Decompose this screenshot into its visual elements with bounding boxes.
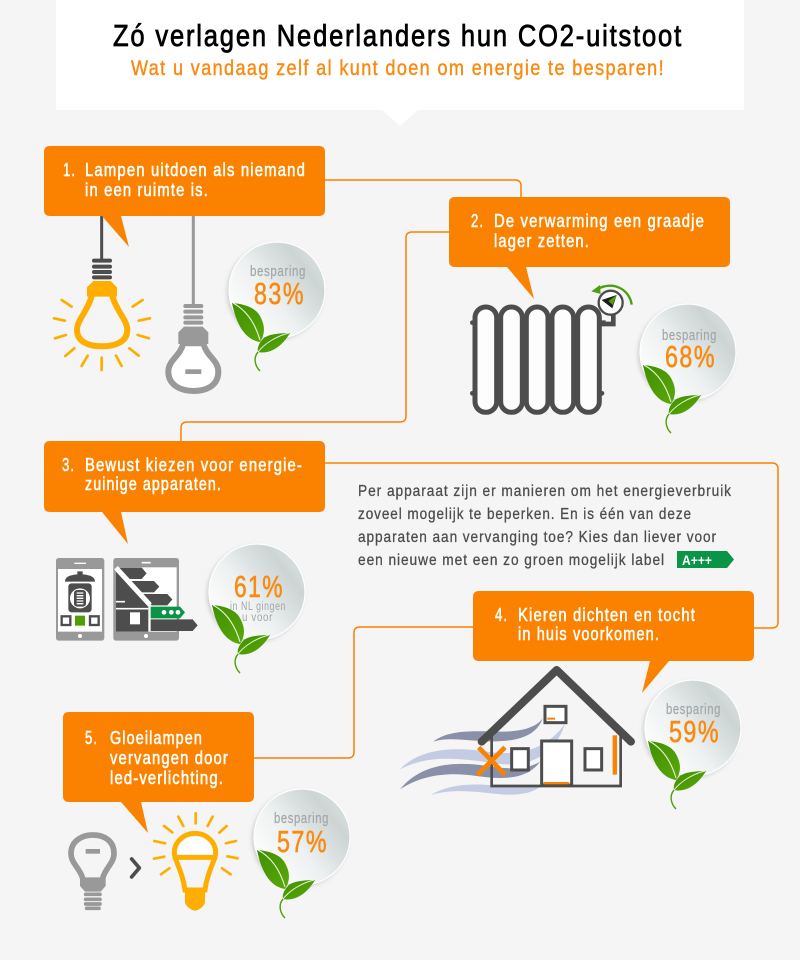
badge: 83%	[227, 242, 325, 371]
title: Zó verlagen Nederlanders hun CO2-uitstoot	[113, 18, 683, 53]
icon: drafty house	[400, 670, 631, 795]
badge: 57%: 57%	[277, 824, 328, 859]
badge: 57%	[252, 789, 350, 918]
icon: led bulb	[154, 813, 238, 911]
badge: 68%: besparing	[662, 327, 717, 344]
thermostat dial	[591, 285, 632, 315]
callout 5	[63, 712, 254, 833]
header panel	[56, 0, 744, 126]
callout 4	[473, 591, 754, 693]
badge: 68%	[638, 304, 736, 433]
energy label A+++: A+++	[682, 552, 712, 568]
icon: smartphone with appliance	[56, 558, 104, 641]
callout 5: led-verlichting.	[110, 768, 224, 788]
text block: appliances: een nieuwe met een zo groen mogelijk label	[358, 552, 665, 569]
subtitle: Wat u vandaag zelf al kunt doen om energie te besparen!	[131, 57, 665, 80]
badge: 61%: in NL gingen	[230, 601, 286, 613]
text block: appliances	[358, 483, 732, 569]
callout 3: 3.	[62, 455, 75, 475]
badge: 61%	[207, 544, 305, 673]
callout 2: lager zetten.	[494, 231, 590, 251]
icon: incandescent bulb	[71, 835, 114, 908]
text block: appliances: apparaten aan vervanging toe? Kies dan liever voor	[358, 529, 717, 546]
callout 1: 1.	[63, 160, 76, 180]
badge: 61%: 61%	[234, 569, 284, 604]
icon: unlit bulb	[168, 216, 218, 391]
callout 4: Kieren dichten en tocht	[518, 605, 696, 625]
icon: tablet with energy labels	[113, 558, 198, 641]
badge: 57%: besparing	[274, 810, 329, 827]
badge: 59%: 59%	[669, 714, 720, 749]
callout 5: vervangen door	[110, 748, 229, 768]
icon: lit bulb	[54, 216, 150, 370]
energy label A+++	[677, 551, 734, 568]
callout 2	[449, 197, 730, 299]
text block: appliances: zoveel mogelijk te beperken. En is één van deze	[358, 506, 692, 523]
callout 1: in een ruimte is.	[85, 180, 209, 200]
icon: radiator	[472, 285, 632, 412]
connector lines	[181, 180, 778, 758]
callout 1: Lampen uitdoen als niemand	[85, 160, 306, 180]
icon: chevron arrow	[132, 859, 139, 877]
callout 5: 5.	[85, 728, 98, 748]
badge: 59%: besparing	[666, 701, 721, 718]
badge: 59%	[643, 680, 741, 809]
callout 3	[44, 441, 325, 544]
callout 3: Bewust kiezen voor energie-	[85, 455, 303, 475]
wind	[400, 718, 565, 795]
callout 2: 2.	[471, 211, 484, 231]
badge: 61%: u voor	[242, 612, 273, 624]
badge: 83%: besparing	[250, 263, 306, 280]
text block: appliances: Per apparaat zijn er manieren om het energieverbruik	[358, 483, 732, 500]
badge: 83%: 83%	[254, 276, 305, 311]
callout 1	[44, 146, 325, 247]
badge: 68%: 68%	[665, 339, 716, 374]
callout 4: in huis voorkomen.	[518, 624, 660, 644]
callout 4: 4.	[495, 605, 508, 625]
callout 2: De verwarming een graadje	[494, 211, 705, 231]
callout 3: zuinige apparaten.	[85, 474, 222, 494]
callout 5: Gloeilampen	[110, 728, 203, 748]
